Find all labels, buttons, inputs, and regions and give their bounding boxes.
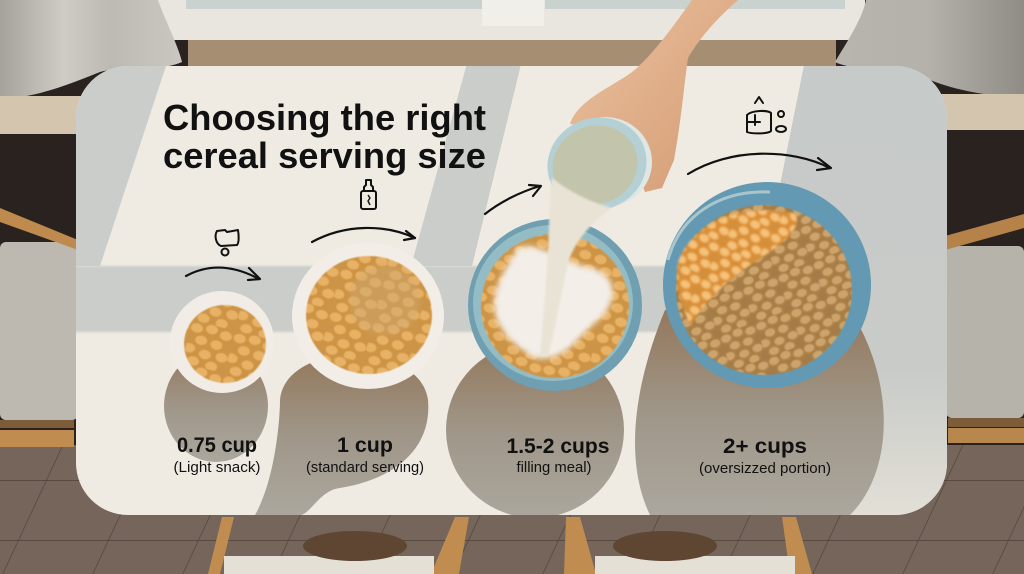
title: cereal serving size [163, 135, 486, 176]
label: 1.5-2 cups: 1.5-2 cups [506, 435, 610, 458]
wall ledge left [0, 96, 90, 134]
label: 0.75 cup: 0.75 cup [177, 434, 257, 457]
milk pool [494, 246, 613, 358]
table [70, 60, 950, 515]
cup outer wall [558, 117, 652, 207]
label: 0.75 cup: (Light snack) [174, 459, 260, 476]
label: 2+ cups: 2+ cups [723, 435, 807, 458]
bowl 3: 1.5-2 cups with milk [468, 219, 642, 391]
table shadows [70, 60, 950, 515]
bowl 4: 2+ cups [663, 182, 871, 388]
label: 1.5-2 cups: filling meal) [516, 459, 592, 476]
floor tiles [0, 445, 1024, 574]
bowl shadows [164, 310, 884, 518]
left curtain [0, 0, 182, 98]
arrow 3 [485, 185, 541, 214]
right curtain [835, 0, 1024, 96]
label: 1 cup: (standard serving) [306, 459, 424, 476]
title: Choosing the right [163, 97, 486, 138]
forearm and hand [570, 0, 738, 192]
milk stream [540, 178, 612, 356]
label: 0.75 cup [174, 434, 260, 476]
icon: cup and spoon [747, 97, 786, 133]
window frame [157, 0, 865, 40]
arrow 1 [186, 268, 260, 280]
milk in cup [541, 114, 649, 216]
wall ledge right [935, 94, 1024, 130]
label: 2+ cups [699, 435, 831, 477]
arrow 4 [688, 154, 831, 174]
left chair [0, 208, 78, 447]
label: 1 cup [306, 434, 424, 476]
icon: milk bottle [361, 180, 376, 209]
cup rim [534, 104, 660, 224]
icon: puddle snack [216, 230, 239, 256]
label: 2+ cups: (oversizzed portion) [699, 460, 831, 477]
woven mat [188, 40, 836, 68]
arrow 2 [312, 228, 415, 242]
label: 1 cup: 1 cup [337, 434, 393, 457]
bowl 2: 1 cup [292, 243, 444, 389]
right chair [945, 214, 1024, 443]
label: 1.5-2 cups [506, 435, 610, 476]
hand and pouring cup [534, 0, 738, 356]
bottom chairs [208, 517, 812, 574]
title [163, 97, 486, 176]
bowl 1: 0.75 cup [170, 291, 274, 393]
